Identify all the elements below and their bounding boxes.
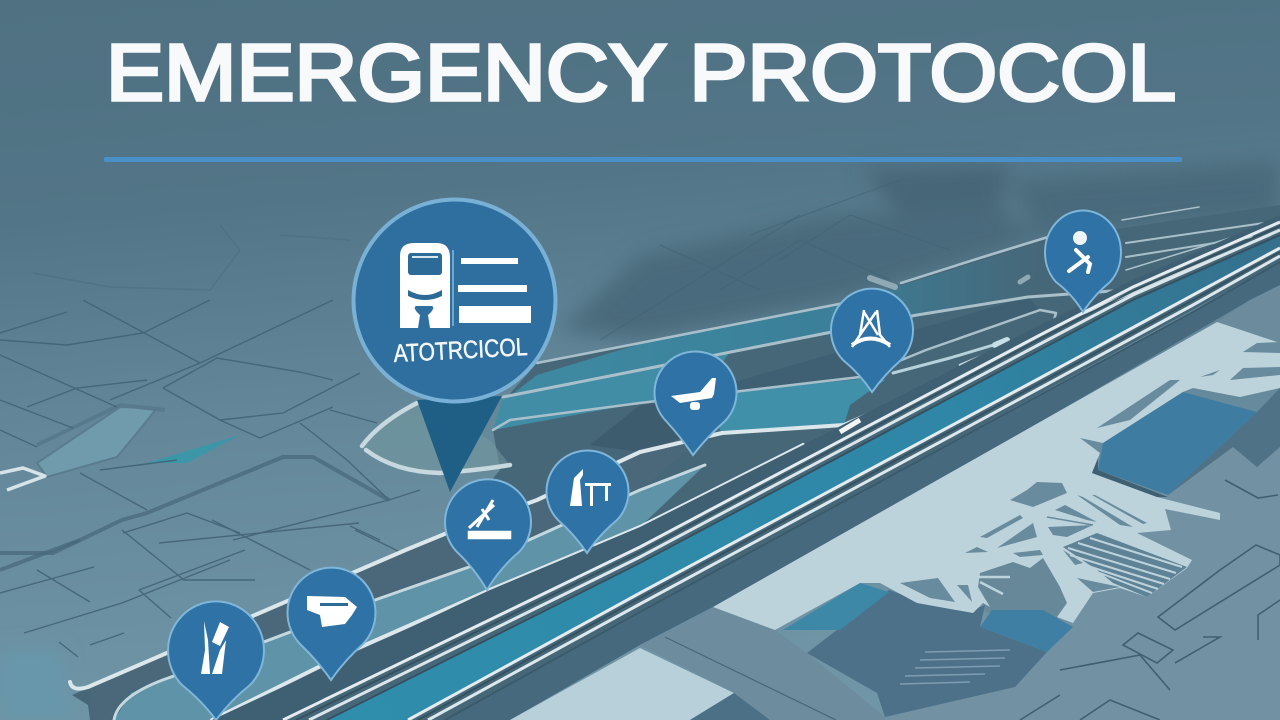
taxiway lines [493,207,1264,430]
icon: tower [852,310,890,347]
pin 4: aircraft [654,352,736,455]
left lake [0,405,240,490]
lower teal apron [114,465,705,720]
bottom left light block [510,648,734,720]
upper taxiway bands [493,243,1040,452]
dark terrain patches [0,160,1280,720]
pin 8: tools [168,601,264,720]
teal runway [327,235,1280,720]
title: EMERGENCY PROTOCOL [106,28,1176,117]
runway rails [283,222,1280,720]
roof block rim [1092,458,1168,497]
pin 5: structure [831,289,913,392]
pin 2: tools [445,479,531,590]
parking stripes [900,650,1010,684]
city street lines [0,180,950,657]
icon: bus [400,243,454,328]
road edge lines [70,235,1270,720]
pin label: ATOTRCICOL [393,333,528,368]
icon: aircraft [671,378,716,410]
pin disc [354,200,556,402]
void fan slats [978,577,1010,594]
dark terminal block [807,590,1047,717]
blue roof block [1098,392,1257,495]
central dark strip [212,215,1280,720]
icon: tools [468,500,511,539]
right shadow block [1168,388,1280,495]
light apron area [713,322,1280,630]
icon: tools [201,621,229,674]
icon: vehicle [307,596,357,627]
pin 3: crane and people [546,451,628,553]
striped terminal wing [1063,533,1187,597]
blue block lower [980,610,1073,652]
pin 1: large protocol pin [354,200,556,492]
pin 6: person [1045,210,1121,312]
pin tail [417,396,502,492]
lower right ground [885,388,1280,720]
apron slits [900,342,1280,602]
dark strip under rail [90,440,700,720]
teal wedge [783,583,889,630]
icon: list bars [458,258,531,323]
pin 7: vehicle [288,568,376,680]
icon: person [1069,231,1090,272]
road complex base [72,205,1280,720]
icon: crane [570,469,611,506]
grey void [975,555,1070,622]
dark band below rails [445,262,1280,720]
runway loop [362,400,510,473]
lower right building outlines [1020,480,1280,720]
title divider [104,157,1182,162]
bottom grey strip [640,607,885,720]
upper right ground [1217,285,1280,343]
